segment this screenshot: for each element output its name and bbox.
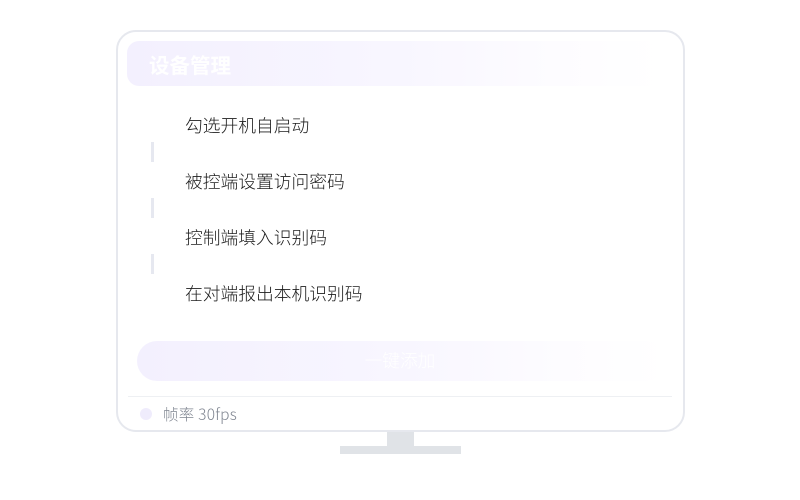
heading: 设备管理 [149, 49, 231, 79]
monitor stand neck [387, 431, 414, 447]
monitor panel [116, 30, 685, 432]
monitor stand base [340, 446, 461, 454]
add button: 一键添加 [137, 341, 667, 381]
frame rate status text: 帧率 30fps [163, 403, 237, 425]
step 4 text: 在对端报出本机识别码 [185, 280, 363, 306]
add button: 一键添加: 一键添加 [365, 347, 435, 373]
step connector 3 [151, 254, 154, 274]
step connector 2 [151, 198, 154, 218]
step connector 1 [151, 142, 154, 162]
step 2 text: 被控端设置访问密码 [185, 168, 345, 194]
step 1 text: 勾选开机自启动 [185, 112, 309, 138]
status dot [140, 408, 152, 420]
status divider [128, 396, 672, 397]
header banner: 设备管理 [127, 41, 662, 86]
step 3 text: 控制端填入识别码 [185, 224, 327, 250]
